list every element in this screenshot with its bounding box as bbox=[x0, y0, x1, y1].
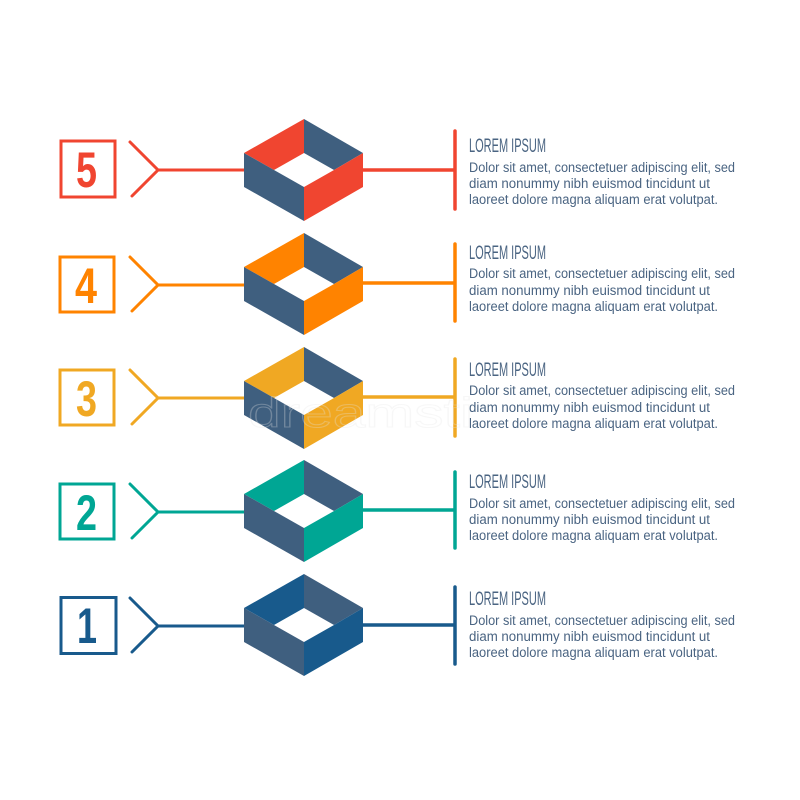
chevron connector 4 bbox=[130, 257, 244, 311]
step 5 bbox=[61, 119, 735, 221]
text block 5: LOREM IPSUM bbox=[469, 136, 546, 157]
text block 3: LOREM IPSUM bbox=[469, 360, 546, 381]
step 4 bbox=[60, 233, 735, 335]
number box 1: 1 bbox=[77, 598, 97, 654]
text block 3: Dolor sit amet, consectetuer adipiscing elit, sed bbox=[469, 383, 735, 398]
text block 3 bbox=[469, 360, 735, 431]
chevron connector 5 bbox=[130, 142, 244, 196]
text block 4 bbox=[469, 243, 735, 314]
bracket line 2 bbox=[363, 472, 455, 548]
number box 4: 4 bbox=[75, 258, 97, 314]
text block 2: Dolor sit amet, consectetuer adipiscing elit, sed bbox=[469, 496, 735, 511]
number box 5 bbox=[61, 141, 115, 198]
isometric box 5 bbox=[244, 119, 363, 221]
number box 3 bbox=[60, 370, 114, 427]
text block 5: diam nonummy nibh euismod tincidunt ut bbox=[469, 176, 710, 191]
text block 4: laoreet dolore magna aliquam erat volutpat. bbox=[469, 299, 718, 314]
isometric box 1 bbox=[244, 574, 363, 676]
number box 1 bbox=[61, 598, 116, 654]
watermark: dreamsti bbox=[248, 389, 473, 436]
text block 1 bbox=[469, 589, 735, 660]
text block 3: diam nonummy nibh euismod tincidunt ut bbox=[469, 400, 710, 415]
step 3 bbox=[60, 347, 735, 449]
text block 3: laoreet dolore magna aliquam erat volutpat. bbox=[469, 416, 718, 431]
bracket line 1 bbox=[363, 587, 455, 664]
bracket line 3 bbox=[363, 359, 455, 436]
text block 2: diam nonummy nibh euismod tincidunt ut bbox=[469, 512, 710, 527]
text block 2: LOREM IPSUM bbox=[469, 472, 546, 493]
text block 1: LOREM IPSUM bbox=[469, 589, 546, 610]
text block 4: LOREM IPSUM bbox=[469, 243, 546, 264]
step 1 bbox=[61, 574, 735, 676]
text block 4: Dolor sit amet, consectetuer adipiscing elit, sed bbox=[469, 266, 735, 281]
chevron connector 3 bbox=[130, 370, 244, 424]
text block 5: laoreet dolore magna aliquam erat volutpat. bbox=[469, 192, 718, 207]
bracket line 4 bbox=[363, 244, 455, 321]
text block 2 bbox=[469, 472, 735, 543]
text block 1: Dolor sit amet, consectetuer adipiscing elit, sed bbox=[469, 613, 735, 628]
number box 5: 5 bbox=[76, 142, 97, 198]
text block 2: laoreet dolore magna aliquam erat volutpat. bbox=[469, 528, 718, 543]
text block 1: laoreet dolore magna aliquam erat volutpat. bbox=[469, 645, 718, 660]
isometric box 3 bbox=[244, 347, 363, 449]
chevron connector 1 bbox=[130, 598, 244, 652]
isometric box 2 bbox=[244, 460, 363, 562]
number box 4 bbox=[60, 257, 114, 314]
step 2 bbox=[60, 460, 735, 562]
number box 2 bbox=[60, 484, 114, 541]
text block 5 bbox=[469, 136, 735, 207]
text block 5: Dolor sit amet, consectetuer adipiscing elit, sed bbox=[469, 160, 735, 175]
chevron connector 2 bbox=[130, 484, 244, 538]
isometric box 4 bbox=[244, 233, 363, 335]
number box 2: 2 bbox=[76, 485, 97, 541]
text block 4: diam nonummy nibh euismod tincidunt ut bbox=[469, 283, 710, 298]
number box 3: 3 bbox=[76, 371, 97, 427]
bracket line 5 bbox=[363, 131, 455, 209]
text block 1: diam nonummy nibh euismod tincidunt ut bbox=[469, 629, 710, 644]
